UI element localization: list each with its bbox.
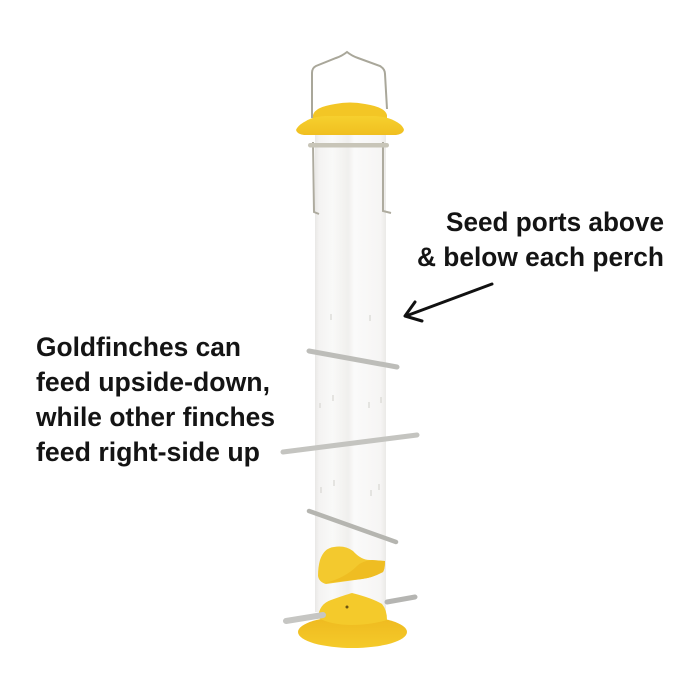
yellow seed deflector <box>318 546 385 584</box>
callout: goldfinches: feed right-side up <box>36 437 260 467</box>
callout: goldfinches <box>35 332 275 467</box>
perch 2 <box>283 435 417 452</box>
base saucer <box>298 616 407 648</box>
left bottom perch <box>286 615 323 621</box>
lid dome <box>313 102 387 120</box>
feeder <box>283 52 417 648</box>
perch 1 <box>309 351 397 367</box>
side rods and band <box>308 142 391 214</box>
hanger wire <box>312 52 387 118</box>
seed ports <box>320 314 381 496</box>
callout: seed ports: & below each perch <box>417 242 664 272</box>
callout: goldfinches: feed upside-down, <box>36 367 270 397</box>
arrow pointing at tube <box>405 284 492 321</box>
lid brim <box>296 116 404 135</box>
right bottom perch <box>387 597 415 602</box>
callout: goldfinches: Goldfinches can <box>36 332 241 362</box>
perch 3 <box>309 511 396 542</box>
base dome <box>318 593 387 625</box>
seed tube <box>315 134 386 612</box>
callout: seed ports: Seed ports above <box>446 207 664 237</box>
callout: seed ports <box>417 207 664 272</box>
callout: goldfinches: while other finches <box>35 402 275 432</box>
